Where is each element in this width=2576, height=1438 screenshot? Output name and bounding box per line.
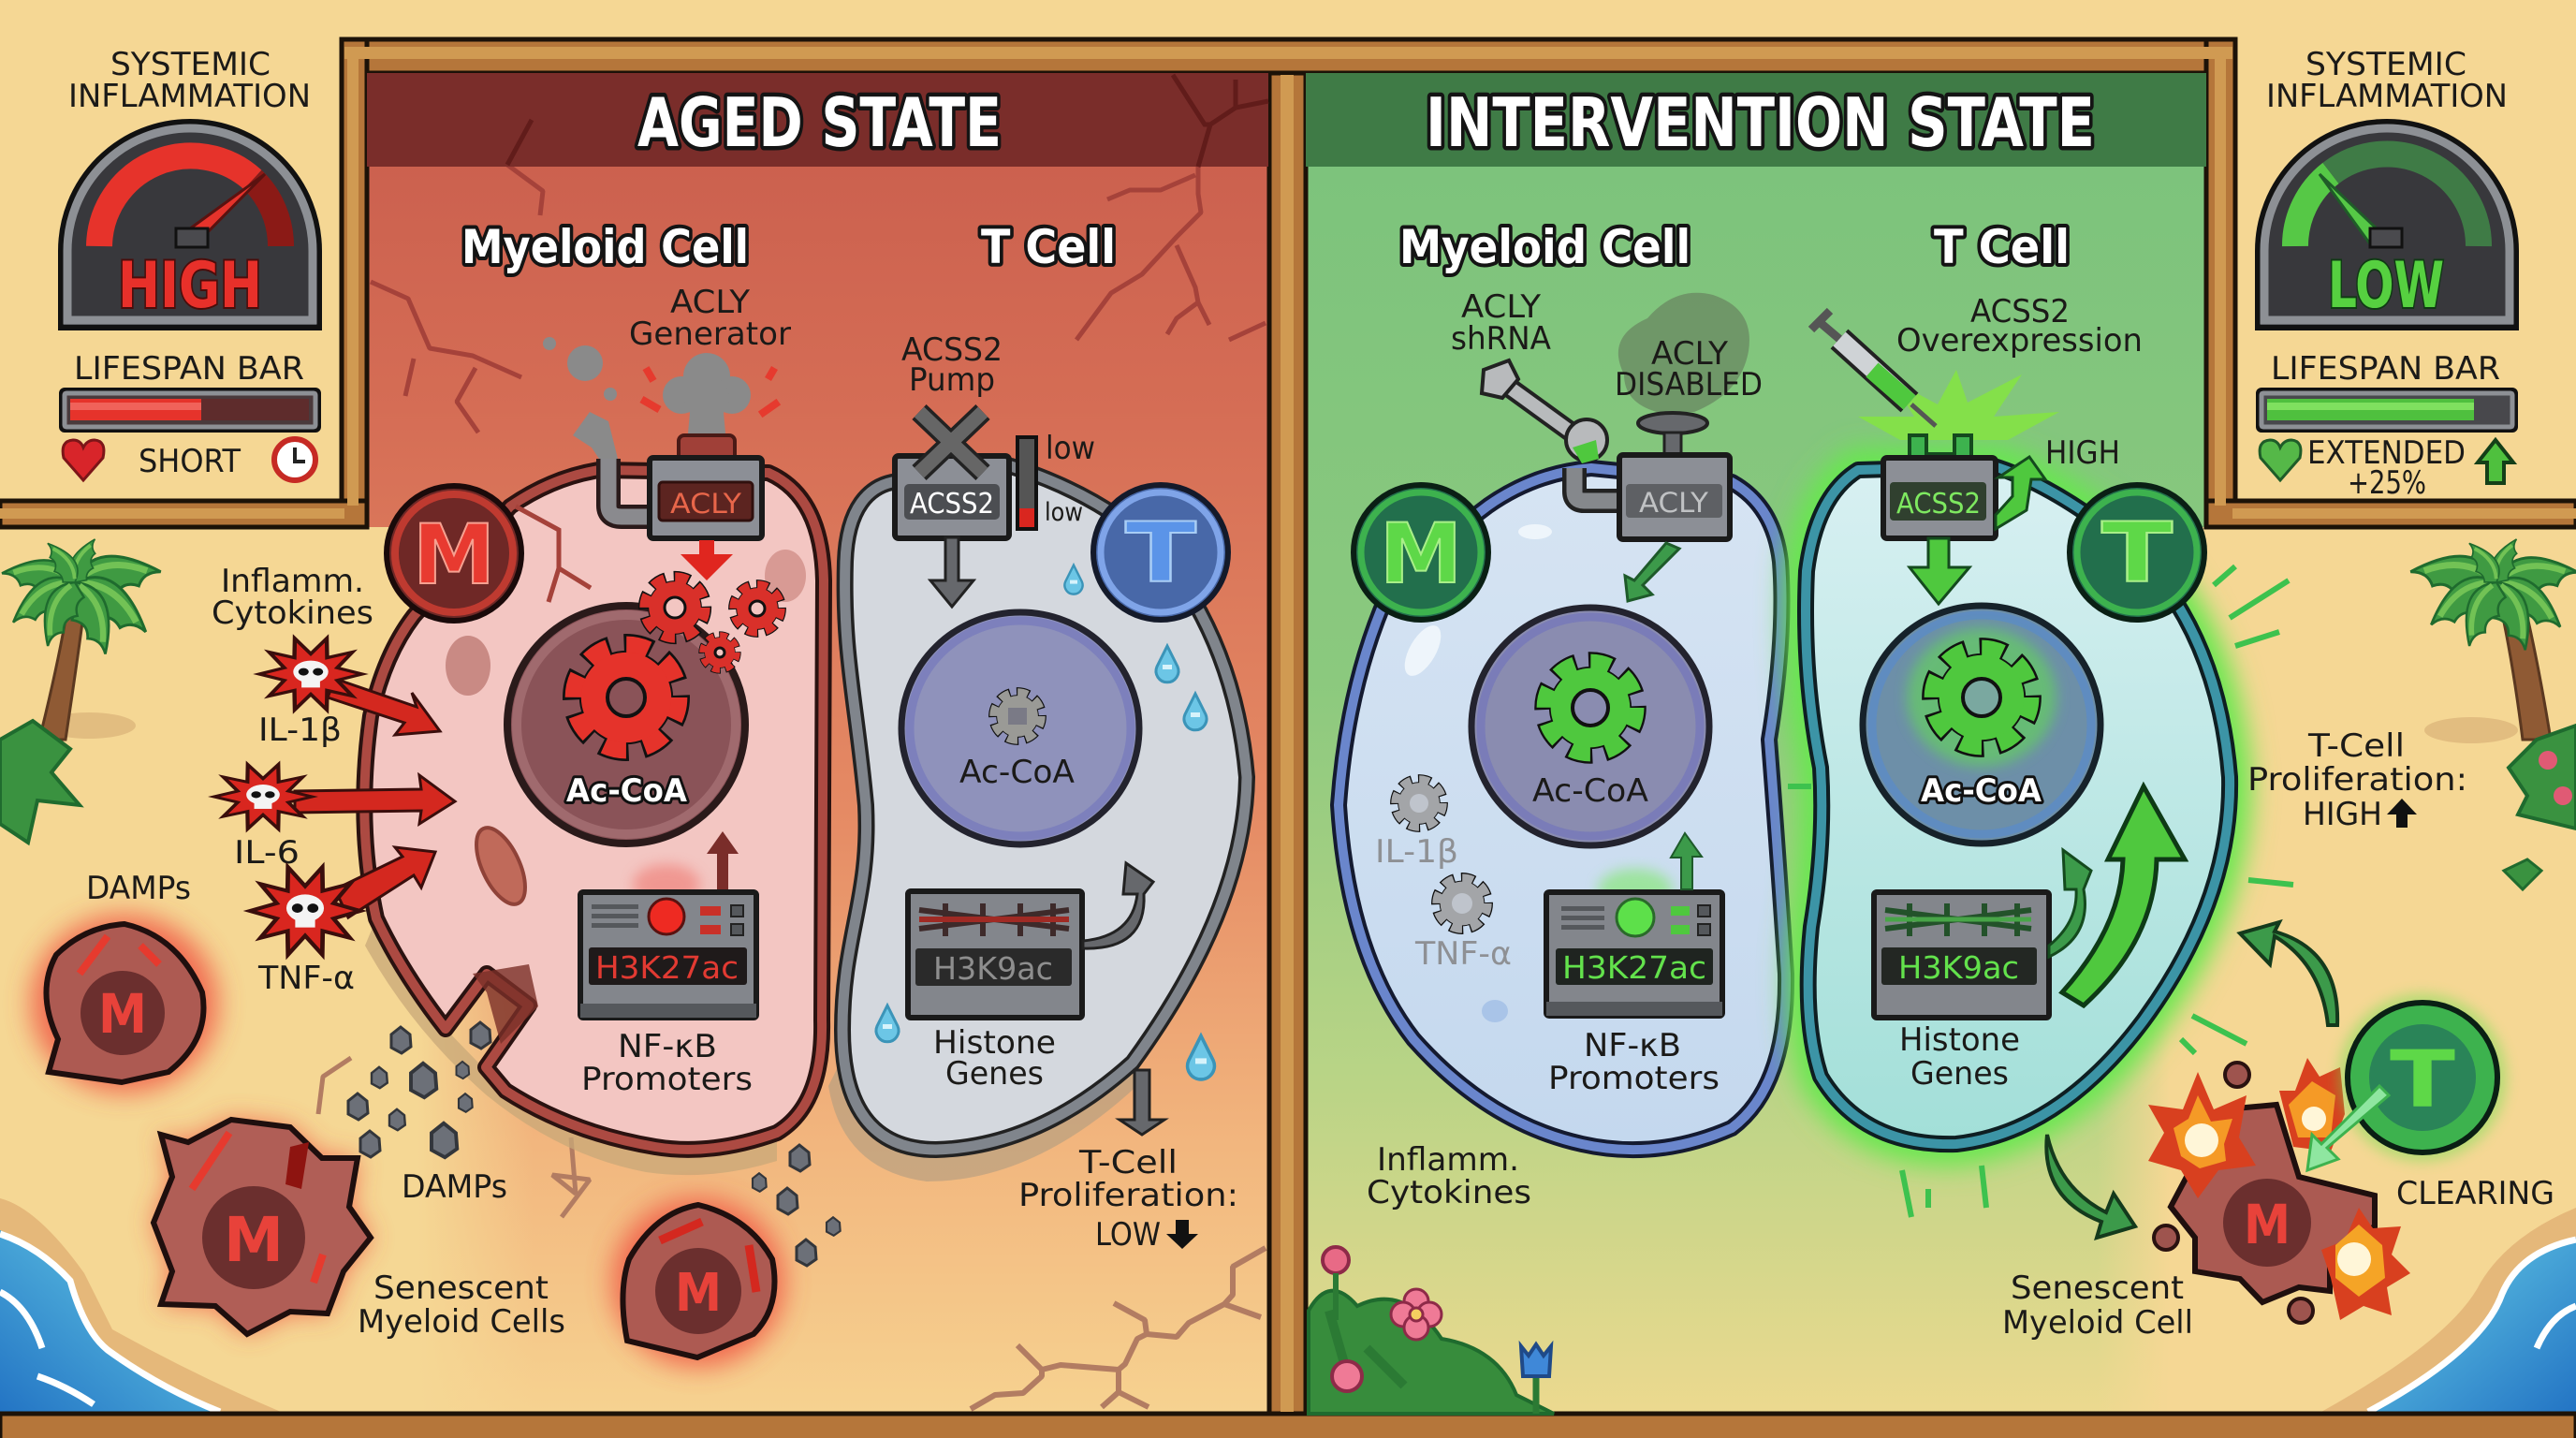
heading: intervention myeloid cell: Myeloid Cell <box>1399 220 1690 274</box>
label: il-6: IL-6 <box>234 834 300 872</box>
flowers bottom of intervention panel <box>1309 1247 1554 1414</box>
gauge: low: LOW <box>2328 249 2444 323</box>
intervention myeloid cell <box>1339 293 1786 1150</box>
up arrow to nucleus <box>707 831 739 889</box>
cell body <box>842 466 1247 1150</box>
header crack <box>507 75 1268 167</box>
blotches and mitochondrion <box>446 506 806 911</box>
smoke <box>543 337 751 463</box>
nucleus <box>1471 608 1709 845</box>
badge: T intervention: T <box>2101 505 2173 601</box>
lever low <box>1017 437 1036 529</box>
cell ground shadow <box>365 918 777 1175</box>
cell membrane <box>1339 468 1786 1150</box>
icon: high up arrow <box>2387 799 2417 828</box>
palm tree left <box>0 535 164 740</box>
aged myeloid cell <box>364 337 824 1175</box>
cell membrane <box>1806 466 2230 1144</box>
aged header bar <box>367 73 1268 167</box>
green arrow <box>1625 543 1679 601</box>
label: acss2 pump: Pump <box>909 361 995 399</box>
h3k27ac aged box: H3K27ac <box>595 949 739 986</box>
label: senescent myeloid cell: Myeloid Cell <box>2002 1304 2193 1342</box>
label: systemic inflammation right: INFLAMMATION <box>2266 78 2508 115</box>
label: nf-kb promoters aged: NF-κB <box>618 1028 717 1065</box>
highlights <box>1398 524 1552 1022</box>
cell body <box>1806 466 2230 1144</box>
acly disabled box: ACLY <box>1639 487 1708 519</box>
badge: T intervention <box>2070 485 2204 620</box>
intervention t cell <box>1806 311 2230 1144</box>
heading: aged myeloid cell: Myeloid Cell <box>461 220 749 274</box>
red down arrow <box>681 540 733 580</box>
heading: intervention t cell: T Cell <box>1934 220 2070 274</box>
h3k9ac aged box <box>908 891 1082 1018</box>
green up arrow <box>1671 833 1702 889</box>
lifespan bar short <box>61 389 319 431</box>
label: acly disabled: DISABLED <box>1615 366 1763 404</box>
aged t cell <box>828 412 1247 1181</box>
large red gear <box>575 646 678 749</box>
pipe inner <box>608 459 651 517</box>
cracks in aged panel <box>318 75 1268 1409</box>
label: ac-coa: Ac-CoA <box>566 772 688 810</box>
bush left <box>0 721 80 843</box>
label: t-cell proliferation high: T-Cell <box>2307 727 2405 765</box>
h3k27ac intervention box <box>1546 869 1722 1016</box>
senescent cell 3: M <box>675 1263 722 1324</box>
title: aged state: AGED STATE <box>637 83 1002 162</box>
gauge: low <box>2258 122 2516 328</box>
nucleus <box>901 612 1139 844</box>
acly disabled box <box>1619 455 1730 539</box>
curved grey arrow <box>1083 863 1153 948</box>
label: acss2 pump: ACSS2 <box>901 331 1003 369</box>
label: clearing: CLEARING <box>2396 1175 2554 1212</box>
damps debris <box>348 1022 841 1266</box>
gauge: high: HIGH <box>118 249 262 323</box>
label: acly disabled: ACLY <box>1651 335 1728 373</box>
label: acly generator: ACLY <box>670 284 750 321</box>
label: nf-kb promoters intervention: NF-κB <box>1584 1027 1681 1064</box>
t cell clearing badge: T <box>2390 1034 2455 1125</box>
label: damps lower: DAMPs <box>402 1168 507 1206</box>
palm tree right <box>2408 535 2576 743</box>
label: t-cell proliferation high: HIGH <box>2303 796 2382 833</box>
label: lifespan bar left: LIFESPAN BAR <box>74 350 304 388</box>
label: acly generator: Generator <box>629 315 791 353</box>
label: damps top: DAMPs <box>86 870 191 907</box>
icon: low down arrow <box>1166 1220 1198 1249</box>
icon: clock <box>274 439 315 480</box>
label: senescent myeloid cell: Senescent <box>2011 1269 2184 1307</box>
senescent cell 2: M <box>224 1204 284 1276</box>
syringe <box>1811 311 1936 426</box>
h3k27ac intervention box: H3K27ac <box>1562 949 1706 986</box>
label: histone genes intervention: Genes <box>1910 1055 2009 1093</box>
cytokine arrows <box>295 679 455 917</box>
label: t-cell proliferation low: T-Cell <box>1078 1144 1178 1181</box>
h3k9ac aged box: H3K9ac <box>933 950 1053 987</box>
grey gear <box>994 693 1041 740</box>
bush right with flowers <box>2504 726 2576 889</box>
arrow grey <box>930 537 973 607</box>
green side arrow <box>1996 457 2045 529</box>
panel: aged state background <box>356 73 1268 1414</box>
label: low inside: low <box>1045 498 1083 527</box>
icon: heart left <box>63 440 104 480</box>
sparks <box>639 366 781 418</box>
label: ac-coa: Ac-CoA <box>1921 772 2042 810</box>
notch damage <box>473 964 538 1044</box>
label: t-cell proliferation low: Proliferation: <box>1018 1177 1238 1214</box>
senescent cell 1: M <box>98 982 147 1046</box>
droplets <box>876 565 1214 1079</box>
acly generator <box>650 435 762 538</box>
nucleus <box>507 606 745 844</box>
cell membrane <box>842 466 1247 1150</box>
label: acly shrna: shRNA <box>1451 320 1551 358</box>
right beach <box>2321 1208 2576 1412</box>
pipe <box>608 459 651 517</box>
label: lifespan bar right: LIFESPAN BAR <box>2271 350 2500 388</box>
dark green curved arrow <box>2049 850 2091 957</box>
label: t-cell proliferation low: LOW <box>1095 1216 1161 1254</box>
arrow: down to low proliferation <box>1120 1070 1164 1135</box>
left beach <box>0 1198 281 1412</box>
wrench <box>1482 360 1607 463</box>
title: intervention state: INTERVENTION STATE <box>1426 83 2095 162</box>
panel: intervention state background <box>1306 73 2218 1414</box>
label: systemic inflammation left: SYSTEMIC <box>110 46 271 83</box>
cytokine star il-1b <box>259 638 362 710</box>
pipe <box>1574 468 1617 501</box>
cell body <box>1339 468 1786 1150</box>
label: ac-coa: Ac-CoA <box>959 754 1075 791</box>
acss2 box <box>1883 435 1996 538</box>
nucleus <box>1863 606 2100 844</box>
label: nf-kb promoters aged: Promoters <box>581 1061 753 1098</box>
lifespan bar extended <box>2258 389 2516 431</box>
label: short: SHORT <box>139 443 241 480</box>
panel: right systemic readout <box>2258 46 2516 502</box>
label: low top: low <box>1046 430 1095 467</box>
cytokine star il-6 <box>213 765 313 829</box>
green gear <box>1907 628 2056 767</box>
inflammatory cytokines label: Cytokines <box>212 594 373 632</box>
inflammatory cytokines label: Inflamm. <box>221 563 364 600</box>
h3k9ac intervention box: H3K9ac <box>1898 949 2019 986</box>
arrow: clearing top <box>2240 922 2337 1025</box>
senescent cell 3 <box>612 1198 784 1367</box>
cell body <box>364 470 824 1150</box>
label: il-1b: IL-1β <box>258 712 342 749</box>
acss2 pump: ACSS2 <box>910 488 994 521</box>
label: inflamm cytokines faded: Inflamm. <box>1377 1141 1519 1179</box>
acss2 pump <box>895 412 1009 538</box>
gauge: high <box>61 122 319 328</box>
burst <box>1858 370 2059 440</box>
green down arrow <box>1910 538 1969 604</box>
label: histone genes intervention: Histone <box>1899 1021 2020 1059</box>
faded gears <box>1396 780 1487 929</box>
small red gears <box>645 578 781 669</box>
explosions <box>2148 1058 2410 1320</box>
acly generator: ACLY <box>670 488 741 520</box>
icon: heart right <box>2260 440 2301 480</box>
badge: M aged <box>387 486 521 621</box>
label: acss2 overexpression: Overexpression <box>1896 322 2143 360</box>
badge: M aged: M <box>413 506 495 603</box>
arrow: t cell attacks <box>2307 1086 2389 1170</box>
label: nf-kb promoters intervention: Promoters <box>1548 1060 1720 1097</box>
smoke disabled <box>1618 293 1749 412</box>
h3k27ac aged box <box>580 864 756 1018</box>
badge: T aged: T <box>1125 505 1196 601</box>
label: acly shrna: ACLY <box>1461 288 1541 326</box>
label: systemic inflammation left: INFLAMMATION <box>68 78 311 115</box>
label: senescent myeloid cells: Senescent <box>373 1269 549 1307</box>
energy dashes <box>1788 566 2293 1217</box>
h3k9ac intervention box <box>1874 892 2049 1018</box>
valve <box>1638 413 1707 455</box>
label: acss2 overexpression: ACSS2 <box>1970 293 2070 330</box>
acss2 box: ACSS2 <box>1896 488 1981 521</box>
exploding senescent cell: M <box>2244 1193 2291 1256</box>
arrow: clearing bottom <box>2046 1135 2135 1238</box>
badge: M intervention: M <box>1380 506 1462 602</box>
label: histone genes aged: Histone <box>933 1024 1056 1062</box>
green glow <box>1806 466 2230 1144</box>
label: high: HIGH <box>2045 434 2120 472</box>
large green proliferation arrow <box>2062 786 2185 1005</box>
label: histone genes aged: Genes <box>945 1055 1044 1093</box>
heading: aged t cell: T Cell <box>981 220 1116 274</box>
panel: left systemic readout <box>61 46 319 480</box>
t cell clearing badge <box>2338 993 2507 1162</box>
pipe inner <box>1574 468 1617 501</box>
label: il-1b faded: IL-1β <box>1375 833 1458 871</box>
cell membrane <box>364 470 824 1150</box>
label: systemic inflammation right: SYSTEMIC <box>2305 46 2466 83</box>
cytokine star tnf <box>250 867 360 955</box>
senescent cell 1 <box>31 915 218 1093</box>
cell ground shadow <box>828 1058 1147 1181</box>
label: senescent myeloid cells: Myeloid Cells <box>358 1303 565 1341</box>
badge: M intervention <box>1354 485 1488 620</box>
badge: T aged <box>1093 485 1228 620</box>
intervention header bar <box>1306 73 2206 167</box>
label: tnf-alpha: TNF-α <box>257 960 355 997</box>
label: extended +25%: EXTENDED <box>2307 434 2466 472</box>
exploding senescent cell <box>2154 1063 2375 1323</box>
senescent cell 2 <box>154 1120 371 1334</box>
label: t-cell proliferation high: Proliferation: <box>2247 761 2467 799</box>
label: tnf faded: TNF-α <box>1414 935 1512 973</box>
label: ac-coa: Ac-CoA <box>1532 772 1648 810</box>
label: inflamm cytokines faded: Cytokines <box>1367 1174 1531 1211</box>
icon: up arrow right <box>2478 440 2513 483</box>
green gear <box>1544 662 1636 754</box>
label: extended +25%: +25% <box>2348 464 2426 502</box>
